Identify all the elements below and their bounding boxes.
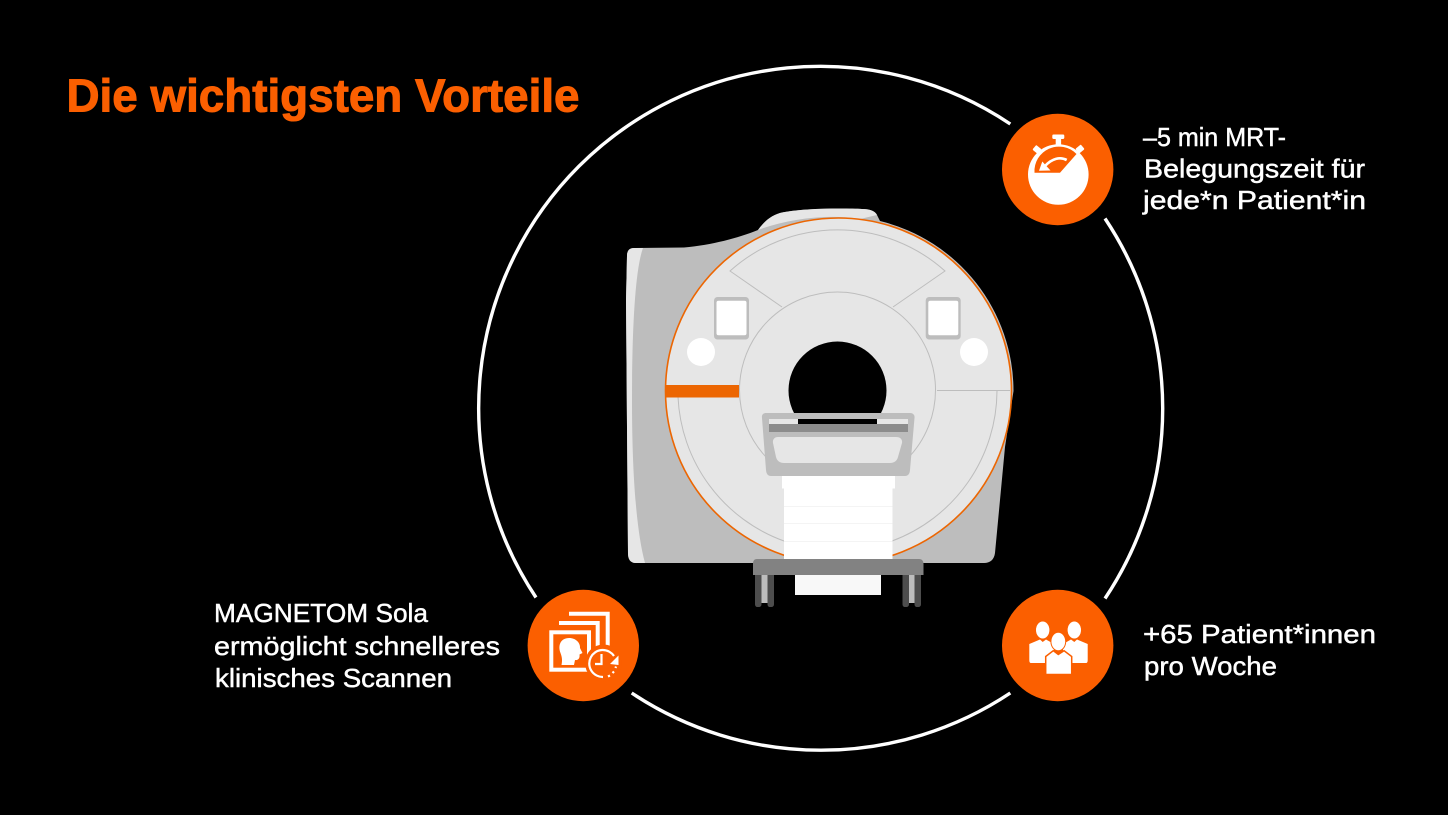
text: scan time benefit: jede*n Patient*in — [1142, 185, 1366, 215]
MRI scanner illustration — [626, 208, 1014, 607]
right control window — [926, 297, 961, 340]
icon: group of patients — [1002, 590, 1113, 701]
left control window — [714, 297, 749, 340]
patient table stack — [782, 476, 895, 560]
table head — [762, 413, 915, 476]
right white button — [960, 338, 988, 366]
left white button — [687, 338, 715, 366]
text: faster clinical scanning benefit: klinisches Scannen — [215, 663, 452, 693]
text: faster clinical scanning benefit: ermöglicht schnelleres — [214, 631, 500, 661]
housing light side strip — [626, 248, 645, 563]
text: scan time benefit: Belegungszeit für — [1144, 154, 1365, 184]
ring of arcs connecting the benefits — [479, 66, 1163, 750]
text: scan time benefit: –5 min MRT- — [1143, 122, 1286, 152]
text: patients per week benefit: +65 Patient*innen — [1143, 619, 1376, 649]
text: patients per week benefit: pro Woche — [1144, 651, 1277, 681]
front ring with orange edge — [666, 218, 1012, 564]
text: patients per week benefit — [1143, 619, 1376, 681]
text: faster clinical scanning benefit: MAGNETOM Sola — [214, 598, 429, 628]
scanner housing — [626, 208, 1014, 563]
text: scan time benefit — [1142, 122, 1366, 215]
front panel seam lines — [678, 230, 1010, 541]
table base — [753, 559, 924, 607]
bore opening — [788, 342, 886, 440]
title: Die wichtigsten Vorteile — [66, 70, 580, 122]
text: faster clinical scanning benefit — [214, 598, 500, 693]
orange stripe — [665, 385, 739, 398]
top hood — [758, 208, 877, 230]
icon: stopwatch — [1002, 114, 1113, 225]
icon: image stack with clock — [528, 590, 639, 701]
